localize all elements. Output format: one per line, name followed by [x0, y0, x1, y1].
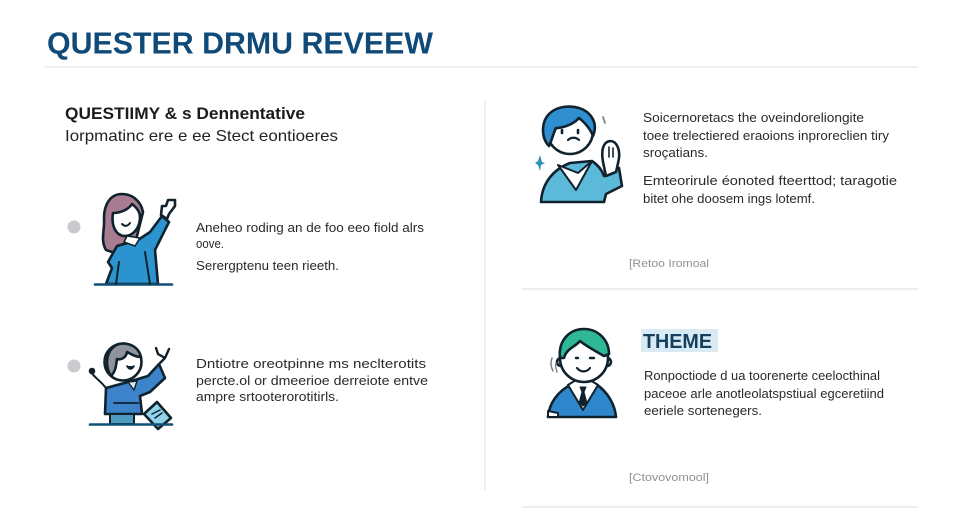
item note: Serergptenu teen rieeth. [196, 258, 339, 273]
intro line: Iorpmatinc ere e ee Stect eontioeres [65, 128, 338, 145]
item text: Aneheo roding an de foo eeo fiold alrs [196, 220, 425, 235]
panel: left intro heading [65, 104, 338, 145]
theme heading: THEME [643, 331, 712, 353]
body text four: Emteorirule éonoted fteerttod; taragotie [643, 173, 897, 188]
body text five: bitet ohe doosem ings lotemf. [643, 191, 815, 206]
panel: top right item [535, 107, 897, 270]
title: QUESTER DRMU REVEEW [47, 26, 434, 60]
icon: man in suit [548, 329, 616, 417]
item text line three: ampre srtooterorotitirls. [196, 389, 339, 404]
icon: sparkle [535, 155, 545, 171]
icon: person holding tablet [90, 344, 172, 429]
panel: second left item [68, 344, 428, 429]
icon: woman waving [95, 194, 175, 284]
item text line: oove. [196, 236, 224, 251]
body text two: toee trelectiered eraoions inproreclien tiry [643, 128, 890, 143]
item text line two: percte.ol or dmeerioe derreiote entve [196, 373, 428, 388]
item text lines: Dntiotre oreotpinne ms neclterotits [196, 356, 427, 371]
body text one: Soicernoretacs the oveindoreliongite [643, 110, 864, 125]
panel: theme item [548, 329, 884, 484]
subheading: QUESTIIMY & s Dennentative [65, 104, 305, 123]
theme text three: eeriele sortenegers. [644, 403, 762, 418]
icon: person raising hand [541, 107, 622, 202]
panel: first left item [68, 194, 425, 284]
caption: [Ctovovomool] [629, 472, 709, 484]
body text three: sroçatians. [643, 145, 708, 160]
theme text two: paceoe arle anotleolatspstiual egceretiind [644, 386, 884, 401]
caption: [Retoo Iromoal [629, 258, 709, 270]
icon: second bullet [68, 360, 80, 372]
icon: first bullet [68, 220, 80, 234]
theme text one: Ronpoctiode d ua toorenerte ceelocthinal [644, 368, 880, 383]
